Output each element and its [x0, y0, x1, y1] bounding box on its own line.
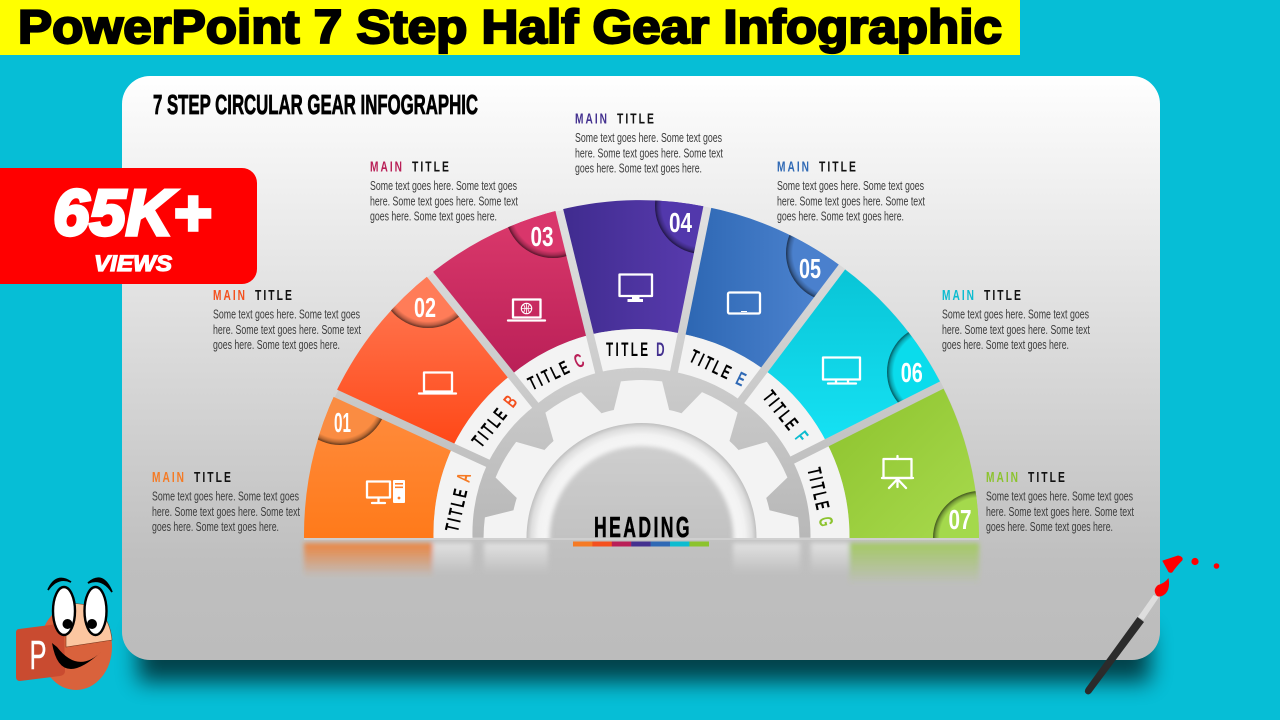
main title 02: MAIN: [213, 287, 247, 304]
segment 06: [744, 270, 940, 456]
number badge 04: [655, 200, 704, 254]
main title 01: MAIN: [152, 469, 186, 486]
body 01: [152, 488, 300, 534]
mascot: PowerPoint character: [16, 578, 112, 690]
body 02: here. Some text goes here. Some text: [213, 322, 361, 337]
top title banner: [0, 0, 1020, 55]
gray underlay behind segments: [304, 201, 979, 538]
icon: desktop and tower: [367, 480, 405, 503]
icon: laptop: [419, 372, 456, 394]
body 05: [777, 178, 925, 224]
brush bristles: [1155, 578, 1169, 596]
segment numbers: 06: [901, 357, 923, 388]
segment numbers: 07: [948, 504, 972, 535]
body 03: goes here. Some text goes here.: [370, 208, 497, 224]
badge number: 65K+: [53, 176, 211, 249]
number badge 05: [786, 235, 839, 298]
main title 07: [986, 469, 1067, 486]
main title 04: MAIN: [575, 110, 609, 128]
brush handle: [1085, 617, 1144, 694]
band titles: TITLE E: [686, 346, 751, 392]
number badge 02: [391, 276, 459, 328]
segment 04: [563, 200, 704, 372]
segment 07: [794, 388, 979, 538]
brush ferrule: [1138, 595, 1159, 620]
main title 06: [942, 287, 1023, 304]
number badge 07: [933, 491, 979, 538]
body 04: here. Some text goes here. Some text: [575, 146, 723, 160]
segment numbers: 04: [669, 207, 693, 238]
body 07: [986, 488, 1134, 534]
number badge 03: [508, 211, 566, 258]
body 05: goes here. Some text goes here.: [777, 208, 904, 224]
main title 04: [575, 110, 656, 128]
main title 07: MAIN: [986, 469, 1020, 486]
body 02: goes here. Some text goes here.: [213, 337, 340, 352]
main title 05: TITLE: [819, 158, 858, 176]
icon: paint brush: [1085, 556, 1219, 694]
band titles: TITLE G: [802, 466, 838, 531]
body 03: here. Some text goes here. Some text: [370, 194, 518, 208]
main title 04: TITLE: [617, 110, 656, 128]
body 07: goes here. Some text goes here.: [986, 519, 1113, 534]
mascot head: [40, 604, 112, 690]
main title 07: TITLE: [1028, 469, 1067, 486]
mascot P tile: P: [30, 632, 46, 678]
body 01: goes here. Some text goes here.: [152, 519, 279, 534]
gear hub: [547, 444, 736, 538]
panel: main card: [122, 76, 1160, 660]
band: title D: [590, 329, 682, 372]
band titles: TITLE F: [758, 387, 814, 449]
half gear segments: [304, 200, 979, 538]
body 04: goes here. Some text goes here.: [575, 160, 702, 176]
segment 01: [304, 396, 486, 538]
body 05: here. Some text goes here. Some text: [777, 194, 925, 208]
icon: tablet: [728, 292, 760, 314]
body 06: [942, 306, 1090, 352]
paint splashes: [1163, 556, 1219, 572]
main title 03: TITLE: [412, 158, 451, 176]
main title 03: MAIN: [370, 158, 404, 176]
main title 06: TITLE: [984, 287, 1023, 304]
icon: presentation board: [882, 456, 913, 488]
number badge 01: [318, 397, 382, 445]
mascot eyes: [53, 587, 106, 635]
main title 02: TITLE: [255, 287, 294, 304]
body 01: Some text goes here. Some text goes: [152, 488, 299, 504]
number badge 06: [887, 332, 940, 402]
band titles: TITLE D: [606, 339, 667, 361]
segment numbers: 03: [530, 221, 554, 252]
body 04: [575, 130, 723, 176]
main title 01: [152, 469, 233, 486]
main title 02: [213, 287, 294, 304]
text block 07: [986, 469, 1134, 534]
main title 06: MAIN: [942, 287, 976, 304]
body 07: here. Some text goes here. Some text: [986, 504, 1134, 519]
band: title E: [678, 334, 761, 398]
gear body: [514, 410, 770, 538]
gear teeth: [484, 380, 800, 538]
floor reflection: [304, 543, 979, 585]
segment 02: [337, 276, 532, 460]
text block 06: [942, 287, 1090, 352]
body 03: [370, 178, 518, 224]
heading colour bar: [573, 542, 709, 546]
icon: monitor: [620, 274, 652, 302]
body 02: Some text goes here. Some text goes: [213, 306, 360, 322]
panel shadow: [138, 630, 1150, 682]
mascot smile: [52, 643, 101, 669]
main title 03: [370, 158, 451, 176]
band: title C: [514, 336, 595, 403]
floor line: [304, 537, 979, 540]
band titles: TITLE B: [468, 390, 524, 452]
segment numbers: 01: [334, 407, 351, 438]
gear inner ring: [526, 423, 756, 538]
mascot face wedge: [66, 604, 112, 647]
band: title F: [744, 372, 825, 456]
heading: HEADING: [594, 512, 692, 544]
text block 05: [777, 158, 925, 224]
text block 04: [575, 110, 723, 176]
segment numbers: 05: [799, 253, 821, 284]
band: title G: [792, 443, 850, 538]
segment numbers: [334, 207, 972, 535]
body 02: [213, 306, 361, 352]
text block 03: [370, 158, 518, 224]
body 06: Some text goes here. Some text goes: [942, 306, 1089, 322]
body 06: goes here. Some text goes here.: [942, 337, 1069, 352]
mascot eyebrows: [48, 578, 112, 592]
views badge: [0, 168, 257, 284]
heading: [573, 512, 709, 546]
band: title B: [454, 378, 532, 460]
panel heading: 7 STEP CIRCULAR GEAR INFOGRAPHIC: [153, 89, 478, 120]
text block 02: [213, 287, 361, 352]
body 05: Some text goes here. Some text goes: [777, 178, 924, 193]
text block 01: [152, 469, 300, 534]
body 07: Some text goes here. Some text goes: [986, 488, 1133, 504]
band titles: TITLE A: [441, 469, 477, 534]
band titles: [441, 339, 838, 534]
main title 05: [777, 158, 858, 176]
main title 01: TITLE: [194, 469, 233, 486]
body 03: Some text goes here. Some text goes: [370, 178, 517, 193]
main title 05: MAIN: [777, 158, 811, 176]
icon: laptop with globe: [508, 300, 545, 320]
band: title A: [433, 447, 488, 538]
badge label: VIEWS: [94, 251, 172, 276]
body 06: here. Some text goes here. Some text: [942, 322, 1090, 337]
segment 05: [678, 208, 839, 398]
segment numbers: 02: [414, 292, 436, 323]
band titles: TITLE C: [525, 349, 590, 395]
body 01: here. Some text goes here. Some text: [152, 504, 300, 519]
icon: tv: [823, 358, 860, 384]
banner title: PowerPoint 7 Step Half Gear Infographic: [18, 0, 1002, 53]
body 04: Some text goes here. Some text goes: [575, 130, 722, 145]
segment 03: [433, 211, 595, 403]
gear: [484, 380, 800, 538]
